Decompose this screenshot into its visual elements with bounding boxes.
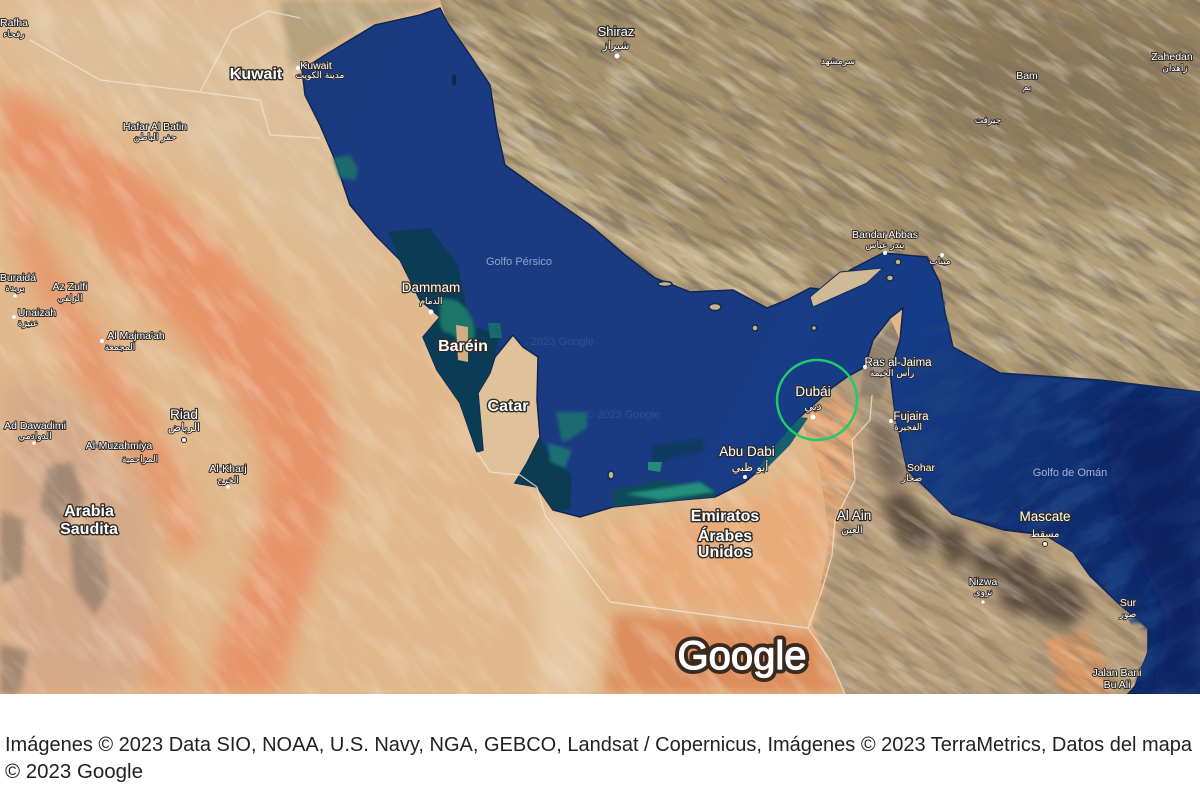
label: Sohar: Sohar [907,462,936,474]
Oman: Musandam rock [860,320,900,400]
label: Dubai [795,384,831,420]
land: north-west plain [6,4,377,272]
label: Unaizah [12,307,56,329]
label: Dammam: الدمام [419,297,443,307]
label: Dammam [402,280,460,314]
label: Mascate: مسقط [1031,529,1059,540]
watermark: 2023 Google: © 2023 Google [586,409,660,421]
label: Barein: Baréin [438,338,488,355]
label: Raiha: رفحاء [3,30,25,40]
label: Bam [1016,70,1038,93]
label: Ad Dawadimi: Ad Dawadimi [4,420,66,432]
label: Shiraz: Shiraz [598,24,634,39]
label: Hafar Al Batin: حفر الباطن [134,133,176,143]
caption: image credits: © 2023 Google [5,761,143,783]
label: Sohar: صحار [901,474,922,484]
water: Bahrain shallows [333,155,502,452]
label: Al-Muzahmiya [86,440,158,465]
label: Golfo de Oman: Golfo de Omán [1033,467,1107,479]
water: UAE southern shallows [515,412,808,510]
label: Mascate: Mascate [1019,509,1071,524]
watermark: 2023 Google: 2023 Google [531,336,594,348]
land: west central plateau [0,380,156,694]
label: Bandar Abbas: Bandar Abbas [852,229,918,241]
label: Sur: صور [1119,610,1136,620]
label: Kuwait City: Kuwait [300,60,332,72]
label: Al Majmaah: Al Majma'ah [107,330,165,342]
label: Riad: Riad [170,407,198,422]
label: Kuwait: Kuwait [230,66,283,83]
land: Catar [478,335,540,475]
borders [30,11,872,694]
label: Al Majmaah: المجمعة [105,343,135,353]
island: Qeshm [810,268,883,307]
label: Iranian small towns [821,57,1001,126]
label: Buraida: بريدة [5,284,25,294]
label: Ad Dawadimi [4,420,66,445]
label: Bandar Abbas [852,229,918,255]
label: Az Zulfi [52,281,88,304]
label: Al-Kharj: الخرج [217,476,239,486]
label: Iranian small towns: جيرفت [975,116,1001,126]
label: Nizwa: Nizwa [969,576,997,588]
label: Golfo Persico: Golfo Pérsico [486,256,552,268]
label: Az Zulfi: الزلفي [57,294,83,304]
label: Raiha [0,17,28,40]
land: Emirates interior sand [606,470,828,619]
label: Iranian small towns: سرمشهد [821,57,855,67]
label: Fujaira: Fujaira [893,411,929,423]
label: Fujaira [889,411,929,433]
label: Abu Dabi [719,444,775,479]
label: Jalan Bani Bu Ali: Jalan Bani [1092,667,1142,679]
Iran: pale coastal strip [447,22,810,305]
label: Al-Kharj: Al-Kharj [209,463,247,475]
label: Riad [168,407,200,442]
highlight: Dubai green circle [777,360,857,440]
label: Emiratos Arabes Unidos: Árabes [698,526,752,545]
label: Sur [1119,597,1137,620]
label: Nizwa: نزوى [974,588,992,598]
caption: image credits [5,734,1193,783]
land: Iran [430,0,1200,400]
label: Emiratos Arabes Unidos: Unidos [698,544,752,561]
label: Bam: بم [1023,83,1031,93]
label: Kuwait City: مدينة الكويت [296,71,345,81]
label: Arabia Saudita: Saudita [60,521,118,538]
logo: Google: Google [678,634,806,678]
land: Oman and Hajar mountains [790,310,1160,694]
label: Shiraz: شيراز [602,39,629,52]
label: Buraida: Buraidá [0,272,36,284]
Iran: darker north-east [900,0,1200,170]
water: Persian Gulf and Gulf of Oman [302,8,1200,694]
label: Al Ain: العين [841,525,863,536]
label: Abu Dabi: Abu Dabi [719,444,775,459]
label: Abu Dabi: أبو ظبي [732,460,768,474]
label: Sohar [901,462,936,484]
Oman: southern orange sands [1045,630,1115,694]
land: dark rock near Arabia Saudita label [0,462,110,694]
label: Catar: Catar [488,398,528,415]
label: Al-Kharj [209,463,247,489]
label: Riad: الرياض [168,421,200,434]
land: orange dune sea [0,85,339,694]
label: Bam: Bam [1016,70,1038,82]
label: Dubai: دبي [804,400,822,413]
Oman: Hajar dark range [868,405,1090,628]
label: Buraida [0,272,36,298]
land: pale sand strip south of Catar [535,510,595,694]
land: north gulf head [280,0,445,70]
label: Jalan Bani Bu Ali: Bu Ali [1104,679,1130,691]
Iran: ridge texture [430,0,1200,400]
label: Emiratos Arabes Unidos: Emiratos [691,508,759,525]
label: Kuwait City [296,60,345,81]
label: Arabia Saudita [60,503,118,538]
label: Ad Dawadimi: الدوادمي [18,432,52,442]
label: Zahedan [1151,51,1193,74]
label: Al Majmaah [100,330,165,353]
label: Ras al-Jaima: رأس الخيمة [870,367,914,379]
label: Shiraz [598,24,634,58]
label: Al-Muzahmiya: المزاحمية [122,455,158,465]
label: Ras al-Jaima [863,357,932,379]
land: south Emirates orange sand [605,612,845,694]
label: Arabia Saudita: Arabia [64,503,114,520]
label: Sur: Sur [1120,597,1137,609]
label: Al Ain [837,508,871,536]
label: Al Ain: Al Ain [837,508,871,523]
label: Unaizah: عنيزة [18,319,38,329]
label: Dubai: Dubái [795,384,831,399]
Iran: lighter plateau in the south-east [950,200,1200,392]
label: Hafar Al Batin: Hafar Al Batin [123,121,187,133]
label: Minab: ميناب [929,257,951,267]
label: Emiratos Arabes Unidos [691,508,759,561]
label: Jalan Bani Bu Ali [1092,667,1142,691]
label: Dammam: Dammam [402,280,460,295]
label: Raiha: Rafha [0,17,28,29]
caption: image credits: Imágenes © 2023 Data SIO, NOAA, U.S. Navy, NGA, GEBCO, Landsat / Copernicus, Imágenes © 2023 TerraMetrics, Datos del mapa [5,734,1193,756]
label: Zahedan: زاهدان [1162,64,1188,74]
label: Hafar Al Batin [123,121,187,143]
label: Ras al-Jaima: Ras al-Jaima [864,357,932,369]
label: Fujaira: الفجيرة [894,423,922,433]
label: Zahedan: Zahedan [1151,51,1193,63]
label: Al-Muzahmiya: Al-Muzahmiya [86,440,152,452]
label: Unaizah: Unaizah [18,307,56,319]
label: Az Zulfi: Az Zulfi [52,281,88,293]
label: Mascate [1019,509,1071,546]
logo: Google: Google [678,634,806,678]
Oman: Emirates border sand [802,391,858,626]
water: deep dark basin [1100,395,1200,694]
water: Gulf of Oman deep texture [885,300,1200,694]
land: texture over Arabian desert [0,0,900,694]
Oman: ridge overlay [803,342,1148,694]
label: Nizwa [969,576,997,604]
watermark: 2023 Google [531,336,660,421]
label: Bandar Abbas: بندر عباس [866,241,904,251]
island: small gulf islands [452,75,901,479]
